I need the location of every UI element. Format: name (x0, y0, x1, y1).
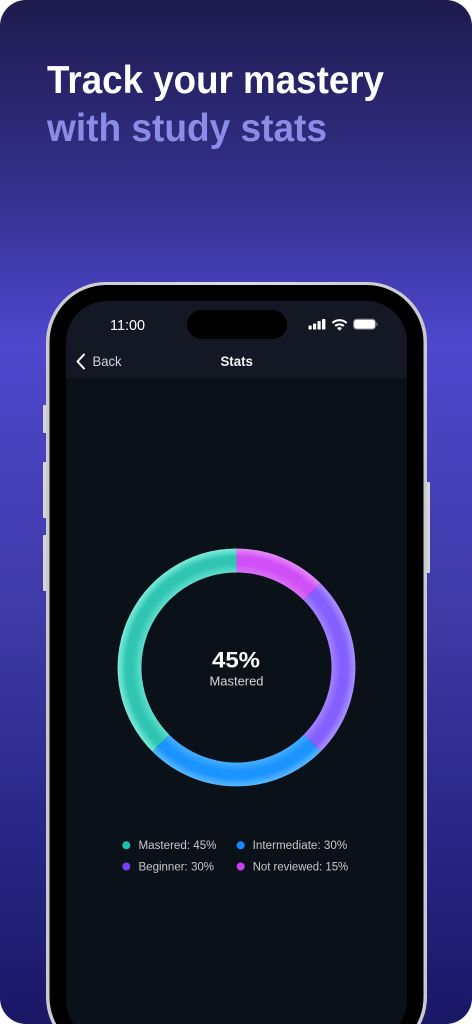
side buttons (43, 405, 430, 591)
screen (66, 301, 407, 1024)
legend item: mastered: Mastered: 45% (138, 840, 216, 852)
donut chart (118, 548, 355, 786)
legend (122, 840, 348, 874)
center value: 45% (212, 648, 260, 673)
segment: mastered (118, 548, 236, 752)
phone mockup (43, 282, 430, 1024)
title (46, 59, 385, 150)
screen title: Stats (220, 354, 253, 369)
heading line 1: Track your mastery (47, 59, 385, 102)
segment: not reviewed (236, 548, 321, 600)
status bar time: 11:00 (110, 317, 145, 334)
legend item: intermediate: Intermediate: 30% (253, 840, 347, 852)
navigation bar background (66, 301, 407, 378)
back label: Back (92, 353, 122, 369)
heading line 2: with study stats (46, 107, 327, 150)
phone frame (46, 282, 427, 1024)
segment: intermediate (152, 735, 321, 786)
icon: battery (354, 319, 378, 329)
legend item: beginner: Beginner: 30% (138, 862, 214, 874)
back chevron (78, 354, 84, 368)
dynamic island (187, 310, 287, 339)
center label: Mastered (210, 674, 264, 689)
icon: signal (308, 319, 325, 330)
phone bezel (50, 285, 424, 1024)
icon: wifi (332, 320, 347, 331)
segment: beginner (304, 583, 355, 752)
legend item: not reviewed: Not reviewed: 15% (253, 862, 348, 874)
